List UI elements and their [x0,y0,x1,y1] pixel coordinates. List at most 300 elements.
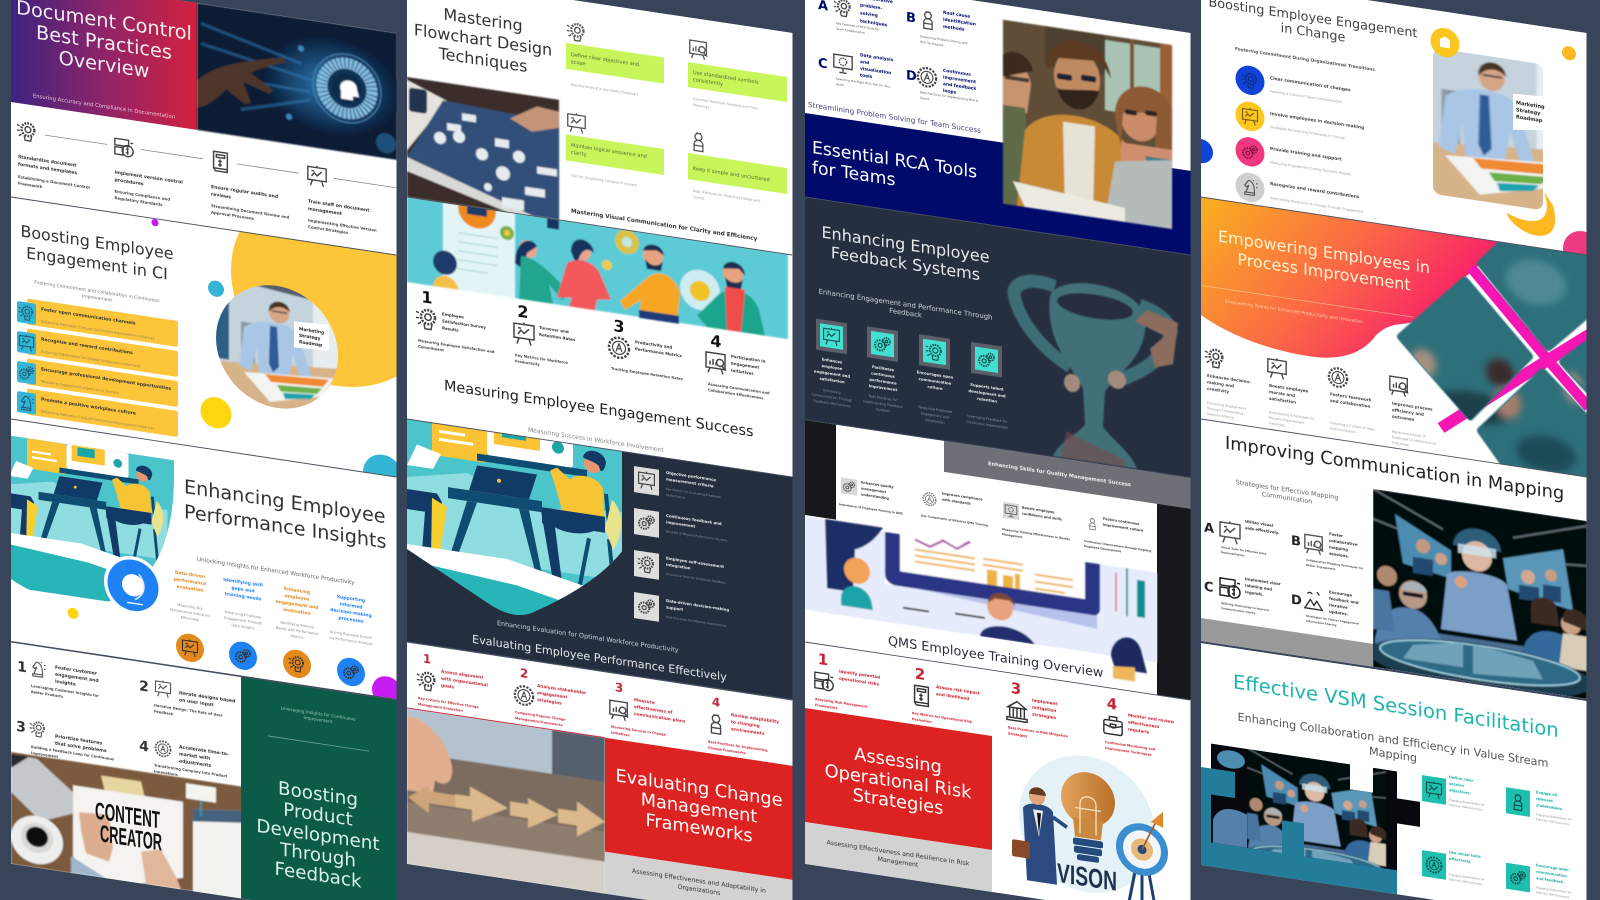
feature 4: Leveraging Feedback for [967,414,1007,424]
item 1: Employee [442,311,464,320]
row 4: Enhancing Motivation Through Continuous Improvement Initiatives [41,410,155,431]
strategy B: Better Engagement [1306,563,1336,571]
item 4 [1104,694,1174,760]
list item 1: Key Metrics for Evaluating Employee [666,487,721,499]
item 1: understanding [861,492,890,501]
column: data driven: Performance Indicators [170,608,210,618]
item 2: Evaluation [912,717,932,724]
item 4 [1236,171,1364,219]
item 3: Engaging Stakeholders for [1449,872,1485,882]
title: Development [256,816,380,855]
panel: Document Control Best Practices slide [11,0,401,256]
strategy A: aids effectively. [1245,525,1280,535]
photo: content creator desk [11,752,243,899]
title: Feedback Systems [831,243,980,284]
feature 4: Continuous Improvement [966,420,1009,430]
item 4: to changing [731,719,760,729]
item 2: Strategies for Involving Employees in Change [1270,125,1345,140]
title: Operational Risk [825,761,972,804]
item 4: market with [179,751,210,762]
panel: Evaluating Change Management Frameworks slide [407,642,793,900]
item 4: adjustments [179,758,211,769]
panel: Evaluating Employee Performance slide [397,408,793,700]
item 4: 4 [1107,694,1117,714]
list item 3: integration [666,562,691,571]
title: Performance Insights [184,500,387,553]
strategy B: B [1291,534,1301,550]
title: Strategies [853,785,943,819]
item 3: Prioritize features [55,735,102,747]
subtitle: Feedback [889,307,922,320]
title: Measuring Employee Engagement Success [444,378,754,440]
tool C: Team [835,82,844,87]
column: decisions [329,593,373,689]
item 2: Empowering Employees for [1269,410,1314,421]
panel: Enhancing Employee Feedback Systems slide [805,197,1191,478]
item 2: Management Frameworks [515,716,563,727]
item: version control: procedures [114,177,144,187]
column 1 of slides [11,0,396,900]
feature 4 [966,341,1009,430]
feature 1 [812,318,852,409]
gray header band: Enhancing Skills for Quality Management Success [988,461,1131,488]
strategy B [1291,526,1364,575]
photo collage with magenta X [1401,177,1600,530]
column: engagement: Metrics [291,634,303,640]
item 3: Communication [1330,426,1356,434]
item 2: on user input [179,697,214,708]
subtitle: Enhancing Engagement and Performance Through [819,288,992,322]
item: logical sequence: clarity [571,150,587,158]
item 4: 4 [139,738,149,756]
feature 1: engagement and [814,368,850,379]
item 3: Strategies [1008,731,1027,738]
item 4: and feedback. [1536,876,1565,885]
item 2: Boosts employee [1269,383,1308,394]
row 4 [17,387,178,437]
title: Best Practices [36,21,172,64]
item 4: Best Practices for Implementing [708,740,768,753]
list item 2 [634,508,728,548]
strategy B: mapping [1329,544,1348,552]
column: decisions: Driving Business Growth [330,630,372,640]
tool A: Key Features of RCA Tools for [836,21,879,32]
feature 2: Systems [876,407,890,413]
item 3 [1236,135,1351,182]
item 4: Accelerate time-to- [179,745,229,758]
strategy A: Representation [1221,550,1244,558]
item 3: 3 [1011,679,1021,698]
item 2: strategies [537,697,562,707]
sign text in photo: Roadmap [1516,114,1543,124]
item 2 [139,677,235,726]
item 3: strategies [1032,712,1057,720]
item: train staff: management [308,206,343,217]
item 1: Effective VSM Outcomes [1449,803,1483,812]
item 4: Assessing Communication and [708,382,770,395]
title: Effective VSM Session Facilitation [1233,670,1559,742]
tool C: tools [860,72,873,80]
list item 1: Objective performance [666,470,716,482]
feature 1: Feedback Mechanisms [814,399,851,408]
photo: man in circle [216,285,338,409]
item: standardize formats [16,122,107,189]
subtitle: Strategies for Effective Mapping [1236,478,1338,502]
subtitle: Fostering Commitment During Organizational Transitions [1235,46,1375,73]
tool C: visualization [860,66,891,76]
subtitle: Mapping [1369,745,1417,765]
item 2 [1506,786,1572,827]
item: logical sequence: Tips for Simplifying Complex Processes [570,173,637,188]
feature 2: Best Practices for [869,394,897,402]
item 1: Define clear [1449,775,1473,783]
item 3: effectiveness of [634,704,673,716]
item 2: Feedback [154,709,174,716]
item 4: improvement culture [1103,523,1144,533]
panel: Effective VSM Session Facilitation slide [1201,643,1587,900]
item 4 [1084,514,1151,558]
tool C: and [860,59,869,66]
column: decisions: Supporting [337,595,365,604]
list rows [17,297,178,437]
item 4: 4 [712,695,720,710]
sign text in photo: Strategy [1516,107,1541,117]
item: version control [114,138,203,213]
item 4: Review adaptability [731,713,779,725]
subtitle: Fostering Commitment and Collaboration in Continuous [34,281,160,304]
item: standard symbols: Use standardized symbols [693,70,758,86]
item 2: Improves compliance [942,492,983,502]
list item 1 [634,465,721,505]
panel: Boosting Product Development Through Feedback slide [11,642,397,900]
column: skill gaps: Enhancing Employee [225,610,261,620]
feature 4: Supports talent [970,382,1004,392]
item 1: making and [1207,379,1234,388]
item 2: 2 [139,678,149,696]
strategy B: collaborative [1329,538,1358,547]
item 3 [609,315,683,381]
subtitle: Unlocking Insights for Enhanced Workforce Productivity [197,557,355,587]
item 2: Comparing Popular Change [515,710,565,722]
item 3: Measuring Success in Change [611,725,666,737]
red divider [407,708,605,738]
feature 3 [917,334,954,426]
item 3: Fostering a Culture of Open [1330,421,1375,432]
item 4: Recognize and reward contributions [1270,181,1360,200]
item 3: mitigation [1032,705,1056,713]
item 4: environments [731,726,765,737]
item: standard symbols [688,40,787,121]
tool D: and feedback [943,81,977,92]
title: Overview [59,46,150,83]
item 2: Productivity [515,359,540,367]
subtitle: Empowering Teams for Enhanced Productivity and Innovation [1225,299,1363,325]
item: audits: Approval Processes [211,210,255,221]
feature 2: Implementing Feedback [863,399,903,409]
tool B: identification [943,17,976,28]
feature 2: improvement [869,383,897,392]
white footer band [805,610,1157,695]
subtitle: Communication [1262,490,1312,506]
feature 2: Facilitates [872,364,894,372]
strategy B: Foster [1329,531,1343,538]
column: skill gaps: Engagement Through [224,616,262,626]
stepped VR photo [1201,733,1431,897]
item 1: insights [55,679,76,688]
item 3: Use visual tools [1449,850,1481,859]
tool A: problem- [860,2,882,12]
item 3 [16,719,114,767]
home badge [1430,26,1460,59]
tool C: C [818,56,828,72]
item: standardize formats: formats and templates [18,162,77,176]
item 1: 1 [421,287,433,308]
item 2: Assess risk impact [936,684,980,696]
tool B: Root cause [943,11,970,20]
item: standardize formats: Standardize document [18,155,76,169]
item 2 [515,665,587,731]
tool D: Teams [919,96,930,101]
tool A [818,0,893,39]
item 4: Collaboration Effectiveness [708,388,763,400]
item: define objectives: Define clear objectives and [571,52,639,68]
icon: gear bulb [17,122,34,142]
item 1: Enhances decision- [1207,373,1251,385]
tool B: methods [943,24,965,33]
column: engagement [276,585,318,681]
item 4: Employee Contributions on [1392,435,1436,446]
item 2: morale and [1269,389,1295,398]
gray header band [944,441,1191,509]
item 3: 3 [613,316,625,337]
title: Flowchart Design [414,20,552,60]
red title panel [605,738,793,880]
item 4 [1506,859,1572,900]
item: logical sequence: Maintain logical sequence and [571,143,647,160]
item: train staff [307,166,396,234]
item 4 [1390,376,1436,451]
strategy C: labeling and [1245,583,1272,592]
item: version control: Regulatory Standards [114,195,163,207]
photo: wooden arrows [407,708,605,894]
column: skill gaps: Data Insights [231,623,255,631]
subtitle: Improvement [82,293,112,304]
item 1: Leveraging Customer Insights for [31,684,99,698]
globe badge [104,556,158,612]
item 2: 2 [915,665,925,684]
sign text in photo [294,322,329,351]
feature 1: Communication Through [812,393,852,403]
item 2: 2 [520,666,528,681]
overline text: Leveraging Insights for Continuous [281,706,355,723]
green title panel [241,676,397,900]
item 4: Employee Development [1084,544,1122,554]
item 1: session [1449,782,1465,788]
item 2 [1236,100,1364,148]
list item 4: Best Practices for Effective Assessments [666,615,727,628]
item 2: Involve employees in decision-making [1270,111,1364,131]
feature 1: Enhancing [823,388,841,395]
item 1: Identify potential [839,669,880,680]
title: Frameworks [645,810,753,847]
item: keep simple: Best Practices for Flowchart Design and [693,189,760,203]
item: train staff: Implementing Effective Version [308,218,377,233]
item 1 [839,477,903,516]
item: keep simple: Layout [693,195,705,201]
item 3: Building a Feedback Loop for Continuous [31,745,114,761]
panel: QMS Employee Training slide [805,420,1191,700]
item 3: 3 [615,680,623,695]
gray caption band: Assessing Effectiveness and Resilience in Risk [827,839,969,868]
item 1 [17,658,99,704]
item: standardize formats: Establishing a Document Control [18,174,90,190]
column: engagement: employee [285,593,309,603]
strategy D: updates. [1329,609,1349,617]
icon: document stack [115,138,133,157]
item 2: Iterate designs based [179,691,235,705]
tool A: Team Collaboration [835,27,865,35]
column: engagement: engagement and [276,599,318,611]
item 3 [1422,846,1485,887]
item 4: Encourage open [1536,863,1569,872]
item 1: goals [441,683,454,691]
item: train staff: Train staff on document [308,200,369,214]
photo: hand touching digital interface [197,3,401,161]
trophy image [1014,272,1178,475]
list item 1: Performance [666,493,685,500]
strategy D: feedback and [1329,596,1359,605]
photo: content creator desk: CREATOR [100,820,162,857]
item 4: Participation in [731,354,766,364]
item 3: Implement [1032,698,1057,706]
item 4: Initiatives [731,368,754,376]
sign text in photo: Roadmap [299,339,322,349]
tagline: Streamlining Problem Solving for Team Success [808,100,981,135]
woman at bottom right [1111,635,1147,683]
item 2: Engaging Stakeholders for [1536,812,1572,822]
subtitle: Enhancing Collaboration and Efficiency in Value Stream [1238,711,1548,770]
panel: Improving Communication in Mapping slide [1201,419,1592,709]
item 2: Process Improvement [1269,416,1305,425]
red title panel [805,708,992,850]
gray band [1201,618,1374,668]
column: skill gaps [223,577,263,673]
panel: Mastering Flowchart Design slide [407,0,793,255]
tool A: solving [860,10,878,19]
item 4: efficiency and [1392,407,1424,417]
item 2: Retention Rates [539,332,576,342]
item 1 [1236,64,1351,110]
item 3: effectively. [1449,857,1471,864]
item 1: Satisfaction Survey [442,318,486,330]
item 3: Best Practices in Risk Mitigation [1008,725,1068,738]
item 2: engagement [537,690,567,701]
item 2: Key Components of Effective QMS Training [921,513,988,527]
item 4: Measuring Impact of [1392,430,1426,439]
list item 4: support [666,604,683,612]
item 3: that solve problems [55,741,107,754]
feature 1: Enhances [822,357,842,365]
item 1: Results [442,325,459,333]
item 1 [1422,771,1485,812]
sign text in photo: Marketing [299,327,324,336]
strategy D: D [1291,593,1302,609]
item 4: effectiveness [1128,719,1160,729]
feature 3: Measuring Employee [918,405,952,414]
list item 2: Continuous feedback and [666,513,722,526]
item 2: Key Metrics for Workforce [515,353,568,365]
item 1: 1 [17,659,27,676]
item 2 [912,664,980,731]
overline text: Improvement [304,715,333,725]
title: Feedback [274,859,362,893]
black side bars [805,420,1191,700]
feature 3: Engagement and [921,411,949,420]
feature 1: employee [822,363,843,371]
gray caption band: Assessing Effectiveness and Adaptability in [632,868,766,895]
item 4 [139,738,229,785]
decorative dots [68,608,396,699]
yellow blob [231,232,396,387]
tool D: Best Practices for Implementing RCA in [920,90,978,103]
title: Assessing [854,744,942,778]
footer heading: Mastering Visual Communication for Clarity and Efficiency [571,209,758,243]
feature 4: development and [968,388,1006,399]
item: define objectives: scope [571,59,586,67]
item 2: satisfaction [1269,396,1296,405]
item: audits: reviews [211,192,231,201]
item: train staff: Control Strategies [308,224,349,235]
tool D [906,62,979,109]
strategy B: Collaborative Mapping Techniques for [1306,558,1363,570]
subtitle: Measuring Success in Workforce Involvement [528,427,664,454]
item 3: Management [1002,532,1023,539]
item 3: Measuring Training Effectiveness in Quality [1002,527,1070,541]
list item 2: improvement [666,519,695,529]
item 2: relevant [1536,797,1553,803]
strategy D: Strategies for Clearer Engagement [1306,614,1359,626]
subtitle: Ensuring Accuracy and Compliance in Documentation [33,93,175,121]
item 4: Innovations [154,769,178,777]
item 1 [1205,348,1251,423]
strategy C: Implement clear [1245,576,1281,586]
row 3: Encourage professional development opportunities [41,367,171,392]
column 4 of slides [1189,0,1600,900]
item: logical sequence [566,112,664,192]
navy title band [805,113,1191,255]
title: Mastering [443,5,523,35]
item 4: Improves process [1392,401,1433,412]
column: engagement: motivation [283,607,311,617]
item 1: Foster customer [55,666,97,677]
strategy C: C [1204,580,1214,596]
item 1: Measuring Employee Satisfaction and [418,339,494,354]
title: Enhancing Employee [821,223,990,267]
gray caption band [805,822,992,892]
title: Engagement in CI [26,243,168,284]
item 2: Key Metrics for Operational Risk [912,711,972,724]
item 1: Clear communication of changes [1270,75,1351,93]
panel: Enhancing Employee Performance Insights slide [2,418,402,709]
item 2: Iterative Design: The Role of User [154,703,223,718]
panel: Essential RCA Tools slide [805,0,1191,255]
strategy A: Utilize visual [1245,519,1273,528]
item 1: 1 [423,651,431,667]
item 3 [1007,678,1069,745]
tool C [818,46,894,95]
item 4 [706,330,770,401]
item: version control: Implement version control [114,171,183,186]
